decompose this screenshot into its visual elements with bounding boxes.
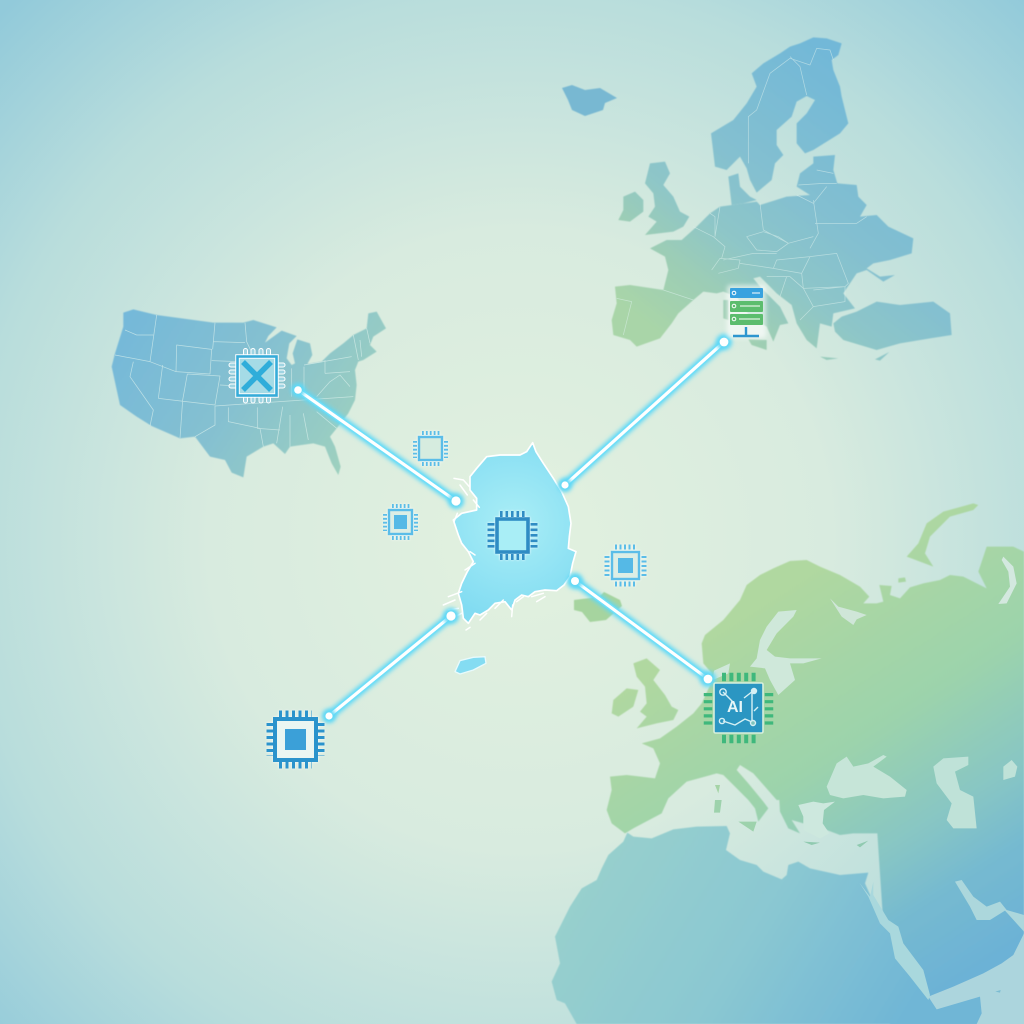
- Aral Sea: [1003, 760, 1017, 780]
- Turkey: [833, 302, 952, 350]
- Great Britain: [633, 658, 678, 728]
- icon: AI chip: [708, 677, 769, 739]
- icon: central chip: [491, 514, 534, 557]
- icon: server stack: [727, 285, 766, 338]
- Sicily and Sardinia: [714, 800, 757, 832]
- Caspian Sea: [933, 757, 977, 828]
- Red Sea: [859, 882, 930, 1000]
- Denmark: [728, 173, 757, 205]
- Iceland (lower): [574, 592, 622, 622]
- Skagerrak: [713, 663, 730, 680]
- circuit traces: [719, 688, 758, 726]
- connector: USA to Korea: [291, 383, 464, 509]
- continent: [612, 155, 913, 348]
- Europe country borders: [617, 48, 867, 335]
- Baltic Sea: [750, 610, 822, 695]
- Cyprus and Crete: [803, 841, 868, 847]
- Great Britain: [645, 162, 689, 235]
- Arabian Sea and Gulf of Aden: [928, 933, 1024, 1024]
- connector: lower-left chip to Korea: [322, 608, 459, 723]
- label: AI: AI: [727, 699, 743, 716]
- Africa: [552, 800, 1024, 1024]
- Black Sea: [827, 755, 907, 798]
- Ob Gulf: [998, 557, 1017, 604]
- map: Eurasia (lower): [552, 503, 1024, 1024]
- US state borders: [115, 315, 370, 447]
- Ireland: [612, 688, 638, 717]
- icon: small outline chip: [415, 433, 446, 464]
- central map: South Korea: [443, 443, 576, 674]
- icon: USA chip with X: [229, 348, 285, 403]
- Aegean Sea: [798, 802, 835, 838]
- coastal islands: [443, 478, 545, 630]
- White Sea: [830, 598, 867, 625]
- Scandinavia: [711, 37, 848, 193]
- map: USA: [112, 309, 386, 477]
- Ireland: [618, 192, 643, 222]
- Socotra: [995, 990, 1001, 993]
- Jeju island: [455, 657, 486, 674]
- map: Iceland (upper): [562, 85, 617, 116]
- icon: small filled chip left: [385, 506, 416, 538]
- connector: Central Europe to Korea: [567, 573, 716, 687]
- Persian Gulf: [955, 880, 1024, 932]
- icon: lower-left chip: [270, 714, 321, 765]
- islands: [723, 300, 889, 361]
- map: Europe (upper): [612, 37, 952, 361]
- Novaya Zemlya: [907, 503, 978, 567]
- Corsica: [715, 785, 720, 793]
- Kolguev island: [898, 577, 906, 583]
- mainland Eurasia: [607, 547, 1024, 1024]
- connector: Italy to Korea: [558, 334, 732, 492]
- icon: small filled chip right: [607, 547, 644, 584]
